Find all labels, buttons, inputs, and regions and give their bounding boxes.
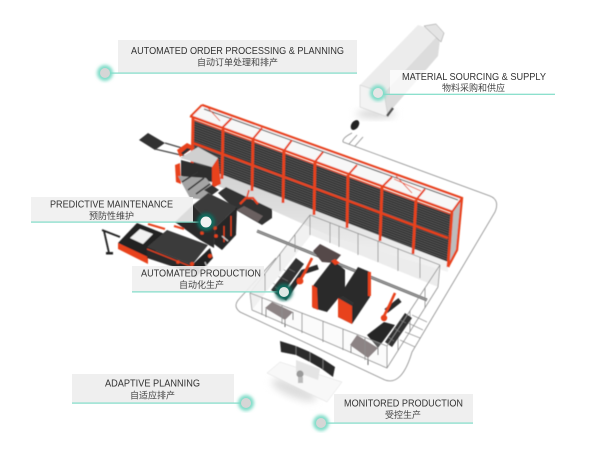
front fence frame bbox=[250, 265, 440, 368]
tower machine 2 bbox=[338, 267, 371, 324]
callout: automated order processing and planning bbox=[97, 40, 357, 81]
robot cell left bbox=[265, 258, 318, 327]
callout: automated production: 自动化生产 bbox=[179, 279, 224, 290]
charging unit bbox=[349, 118, 361, 132]
callout: monitored production bbox=[313, 394, 473, 431]
callout: adaptive planning: ADAPTIVE PLANNING bbox=[105, 378, 200, 390]
monitoring station bbox=[267, 341, 342, 405]
fence back panels bbox=[200, 166, 448, 310]
upper laser machine bbox=[175, 193, 237, 250]
lower laser machine bbox=[102, 223, 213, 278]
callout: automated order processing and planning: AUTOMATED ORDER PROCESSING & PLANNING bbox=[131, 45, 344, 57]
callout: monitored production: MONITORED PRODUCTION bbox=[344, 398, 463, 410]
storage rack bbox=[190, 105, 462, 267]
callout: adaptive planning: 自适应排产 bbox=[130, 390, 175, 400]
callout: monitored production: 受控生产 bbox=[385, 409, 421, 420]
callout: adaptive planning bbox=[72, 374, 254, 411]
feeder table bbox=[139, 133, 185, 156]
callout: predictive maintenance bbox=[31, 197, 215, 231]
truck bbox=[356, 24, 444, 118]
tower machine 1 bbox=[312, 259, 345, 312]
callout: predictive maintenance: PREDICTIVE MAINTENANCE bbox=[50, 198, 173, 210]
fence frame bbox=[250, 215, 440, 350]
callout: material sourcing and supply: 物料采购和供应 bbox=[442, 82, 505, 93]
factory illustration bbox=[102, 24, 497, 405]
callout: automated production: AUTOMATED PRODUCTION bbox=[141, 268, 261, 280]
callout: automated production bbox=[132, 266, 292, 300]
callout: material sourcing and supply: MATERIAL SOURCING & SUPPLY bbox=[402, 71, 546, 83]
callout: automated order processing and planning: 自动订单处理和排产 bbox=[197, 56, 278, 68]
conveyor bbox=[257, 231, 427, 300]
floor boundary line bbox=[236, 133, 497, 381]
callout: material sourcing and supply bbox=[370, 70, 555, 101]
robot table bbox=[218, 187, 272, 225]
pallet stack top bbox=[313, 244, 341, 263]
upper bending unit bbox=[175, 143, 221, 200]
callout: predictive maintenance: 预防性维护 bbox=[89, 210, 134, 221]
robot cell right bbox=[350, 293, 412, 365]
